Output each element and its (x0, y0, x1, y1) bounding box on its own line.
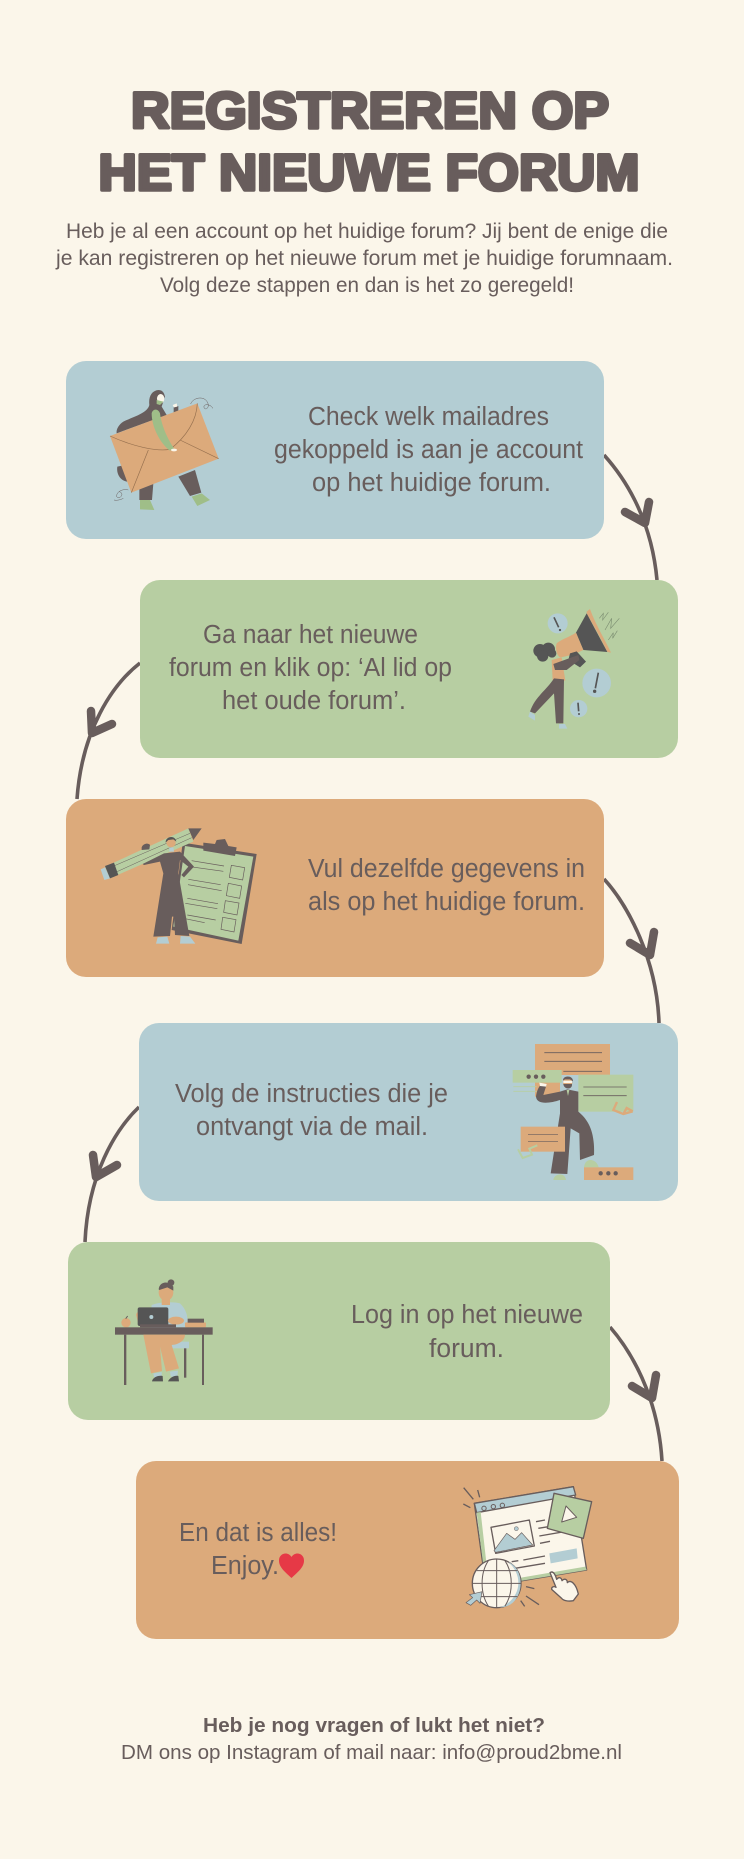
icon: person at desk with laptop (115, 1279, 213, 1385)
arrow: step 4 to 5 (85, 1107, 139, 1242)
step 3 text (308, 855, 585, 916)
step 1 text: op het huidige forum. (312, 469, 551, 497)
intro text: Volg deze stappen en dan is het zo geregeld! (160, 274, 574, 297)
icon: man with chat bubbles (513, 1044, 633, 1180)
step 4 text: ontvangt via de mail. (196, 1113, 428, 1141)
step 2 text: Ga naar het nieuwe (203, 621, 418, 649)
arrow: step 5 to 6 (610, 1327, 662, 1461)
arrow: step 2 to 3 (77, 663, 140, 799)
step 6 text: En dat is alles! (179, 1519, 337, 1547)
step 3 text: als op het huidige forum. (308, 888, 585, 916)
panel: step 2 (140, 580, 678, 758)
intro text (55, 220, 673, 297)
panel: step 6 (136, 1461, 679, 1639)
icon: woman carrying envelope (110, 390, 219, 510)
step 2 text: het oude forum’. (222, 687, 406, 715)
arrow: step 3 to 4 (604, 879, 659, 1023)
title (98, 82, 640, 201)
title: HET NIEUWE FORUM (98, 144, 640, 201)
step 2 text (169, 621, 452, 715)
panel: step 4 (139, 1023, 678, 1201)
footer text (121, 1715, 622, 1764)
footer text: Heb je nog vragen of lukt het niet? (203, 1715, 545, 1737)
step 5 text: Log in op het nieuwe (351, 1301, 583, 1329)
step 1 text: gekoppeld is aan je account (274, 436, 583, 464)
panel: step 5 (68, 1242, 610, 1420)
step 6 text (179, 1519, 337, 1580)
step 3 text: Vul dezelfde gegevens in (308, 855, 585, 883)
title: REGISTREREN OP (131, 82, 609, 139)
intro text: Heb je al een account op het huidige forum? Jij bent de enige die (66, 220, 668, 243)
step 4 text: Volg de instructies die je (175, 1080, 448, 1108)
step 1 text: Check welk mailadres (308, 403, 549, 431)
step 2 text: forum en klik op: ‘Al lid op (169, 654, 452, 682)
step 5 text (351, 1301, 583, 1363)
icon: man with pencil and checklist (101, 828, 257, 944)
arrow: step 1 to 2 (604, 455, 657, 580)
icon: browser window with globe (463, 1487, 592, 1608)
step 4 text (175, 1080, 448, 1141)
panel: step 3 (66, 799, 604, 977)
step 5 text: forum. (429, 1335, 504, 1363)
icon: person with megaphone (528, 609, 619, 729)
footer text: DM ons op Instagram of mail naar: info@proud2bme.nl (121, 1742, 622, 1764)
step 6 text: Enjoy. (211, 1552, 279, 1580)
intro text: je kan registreren op het nieuwe forum met je huidige forumnaam. (55, 247, 673, 270)
icon: red heart (279, 1553, 304, 1578)
panel: step 1 (66, 361, 604, 539)
step 1 text (274, 403, 583, 497)
